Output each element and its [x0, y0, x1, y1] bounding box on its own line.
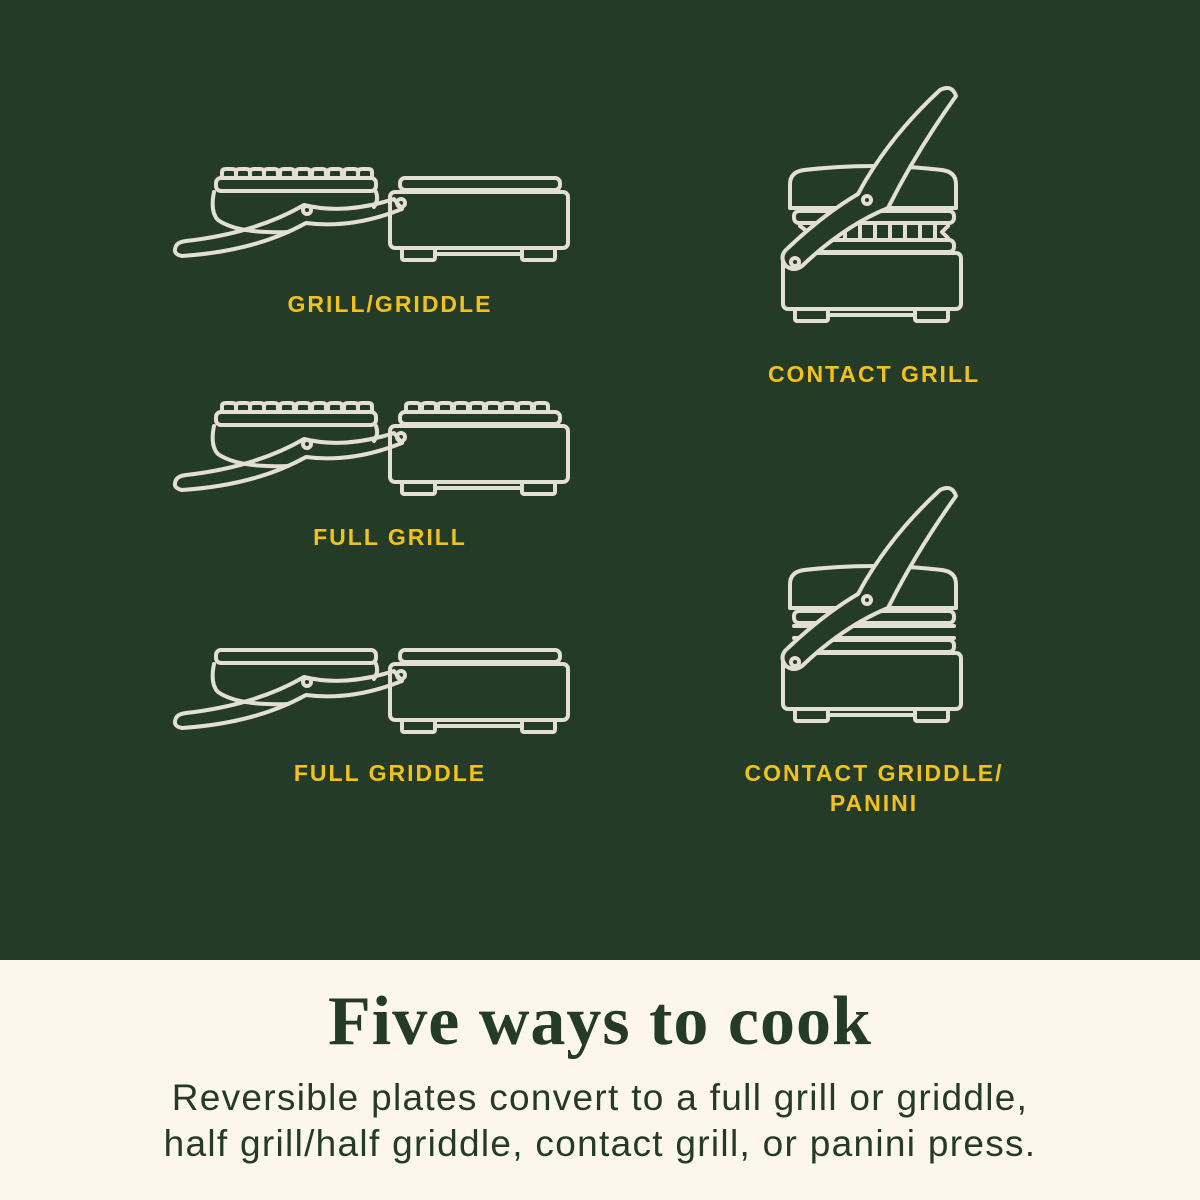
- icon: full griddle: [175, 650, 568, 732]
- icon: full grill: [175, 403, 568, 494]
- label: contact grill: CONTACT GRILL: [768, 361, 980, 387]
- label: full grill: FULL GRILL: [313, 524, 467, 550]
- label: grill/griddle: GRILL/GRIDDLE: [288, 291, 492, 317]
- label: contact griddle/panini: [744, 760, 1004, 816]
- subtitle: [164, 1077, 1036, 1164]
- icon: grill/griddle: [175, 169, 568, 260]
- subtitle: half grill/half griddle, contact grill, or panini press.: [164, 1123, 1036, 1164]
- label: contact griddle/panini: PANINI: [830, 790, 918, 816]
- label: contact griddle/panini: CONTACT GRIDDLE/: [744, 760, 1004, 786]
- icon: contact grill: [782, 88, 961, 321]
- label: full griddle: FULL GRIDDLE: [294, 760, 486, 786]
- subtitle: Reversible plates convert to a full grill or griddle,: [172, 1077, 1028, 1118]
- title: Five ways to cook: [328, 983, 872, 1060]
- icon: contact griddle/panini: [782, 488, 961, 721]
